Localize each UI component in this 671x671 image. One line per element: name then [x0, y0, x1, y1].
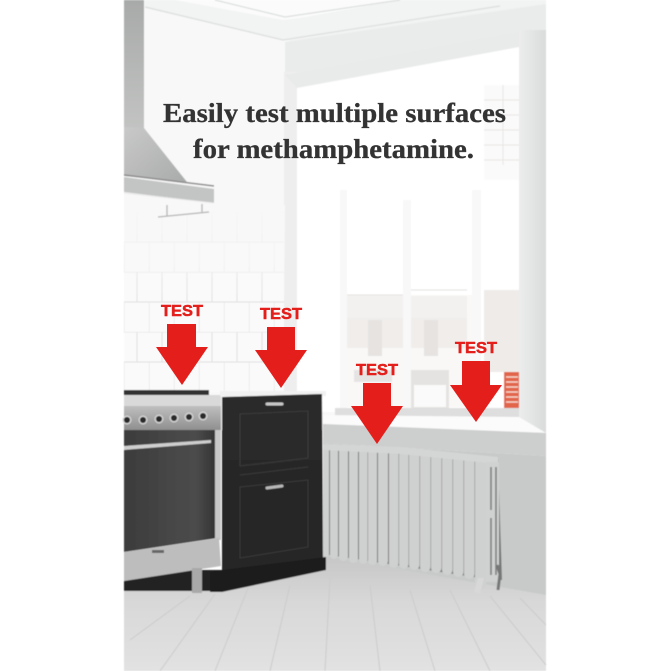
- window glass: [297, 47, 519, 412]
- window lower frame: [335, 408, 519, 417]
- callout: countertop test arrow: [255, 306, 307, 388]
- callout: radiator test arrow: [351, 362, 403, 444]
- oven range: [123, 390, 226, 593]
- label: TEST: [356, 362, 398, 379]
- window frame left post: [284, 72, 297, 417]
- floor planks: [130, 578, 546, 671]
- arrow: [156, 324, 208, 385]
- heading line 1: Easily test multiple surfaces: [163, 98, 506, 128]
- floor: [124, 556, 546, 671]
- cabinet handles: [267, 402, 282, 406]
- tile splashback: [124, 205, 285, 392]
- extractor hood: [124, 0, 214, 217]
- ceiling moulding: [145, 0, 546, 42]
- countertop: [220, 391, 326, 396]
- heading line 2: for methamphetamine.: [193, 134, 474, 164]
- label: TEST: [161, 303, 203, 320]
- view through window: buildings: [347, 85, 519, 411]
- arrow: [351, 383, 403, 444]
- photo: kitchen room scene: [123, 0, 546, 671]
- wall: above window: [285, 4, 546, 75]
- lower wall: [323, 443, 546, 597]
- heading: [163, 98, 506, 164]
- window frame right post: [519, 30, 546, 433]
- callout: window sill test arrow: [450, 340, 502, 422]
- window frame top: [285, 29, 532, 88]
- label: TEST: [260, 306, 302, 323]
- radiator: [323, 444, 502, 594]
- window mullions: [340, 190, 481, 410]
- arrow: [450, 361, 502, 422]
- label: TEST: [455, 340, 497, 357]
- callout: stove test arrow: [156, 303, 208, 385]
- oven knobs: [123, 412, 207, 424]
- wall: upper left: [124, 0, 546, 430]
- arrow: [255, 327, 307, 388]
- window sill: [323, 415, 546, 456]
- black cabinet: [210, 394, 326, 592]
